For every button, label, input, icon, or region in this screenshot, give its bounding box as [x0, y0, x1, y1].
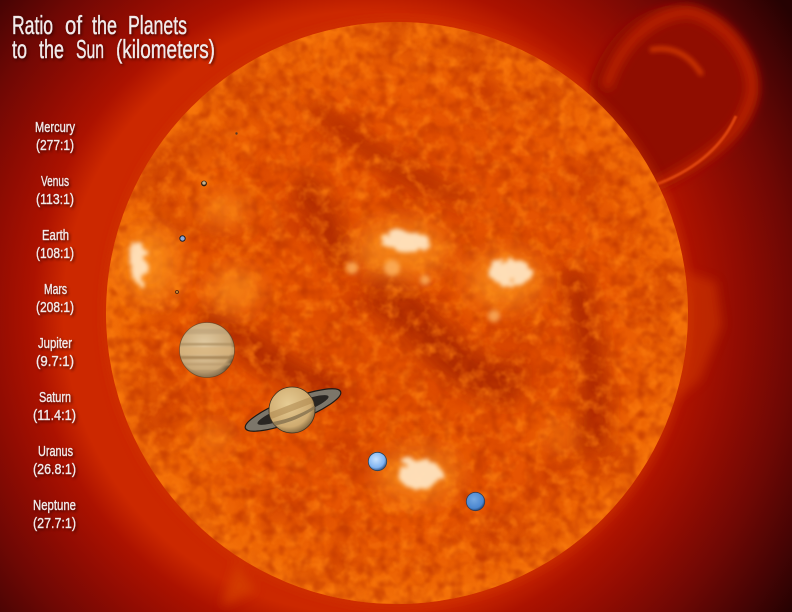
label: Saturn: (11.4:1) [33, 407, 76, 424]
title [12, 10, 215, 64]
dark filaments and patches [200, 105, 594, 450]
granulation texture [100, 15, 700, 612]
label: Uranus [33, 443, 76, 478]
sun outer glow flares [103, 19, 722, 607]
title: the [92, 10, 117, 40]
label: Saturn: Saturn [39, 389, 71, 406]
sun disc [100, 15, 700, 612]
label: Jupiter: Jupiter [38, 335, 72, 352]
planet: Neptune [466, 492, 485, 511]
label: Venus: Venus [41, 173, 69, 190]
label: Earth: Earth [42, 227, 69, 244]
title: the [39, 34, 64, 64]
planet: Earth [179, 235, 186, 242]
label: Venus [36, 173, 74, 208]
planet: Venus [201, 181, 207, 186]
label: Mars: Mars [44, 281, 67, 298]
large-scale dark mottling [100, 15, 700, 612]
planet: Mercury [235, 132, 238, 135]
label: Uranus: Uranus [38, 443, 73, 460]
label: Jupiter: (9.7:1) [36, 353, 74, 370]
planet: Saturn [244, 386, 342, 434]
label: Earth: (108:1) [36, 245, 74, 262]
label: Saturn [33, 389, 76, 424]
label: Neptune: Neptune [33, 497, 76, 514]
label: Mercury: Mercury [35, 119, 75, 136]
title: to [12, 34, 27, 64]
planet: Uranus [368, 452, 387, 471]
title: of [65, 10, 83, 40]
title: (kilometers) [116, 34, 215, 64]
label: Mars [36, 281, 74, 316]
label: Neptune [33, 497, 76, 532]
planet: Mars [175, 290, 179, 294]
active glow regions [122, 195, 576, 501]
white-hot active regions [132, 232, 532, 490]
label: Mercury [35, 119, 75, 154]
label: Earth [36, 227, 74, 262]
label: Mercury: (277:1) [36, 137, 74, 154]
planet labels [33, 119, 76, 532]
label: Uranus: (26.8:1) [33, 461, 76, 478]
label: Mars: (208:1) [36, 299, 74, 316]
label: Venus: (113:1) [36, 191, 74, 208]
title: Ratio [12, 10, 53, 40]
label: Jupiter [36, 335, 74, 370]
planet: Jupiter [179, 322, 235, 378]
title: Sun [76, 34, 104, 64]
title: Planets [128, 10, 187, 40]
solar prominence [589, 5, 758, 192]
label: Neptune: (27.7:1) [33, 515, 76, 532]
